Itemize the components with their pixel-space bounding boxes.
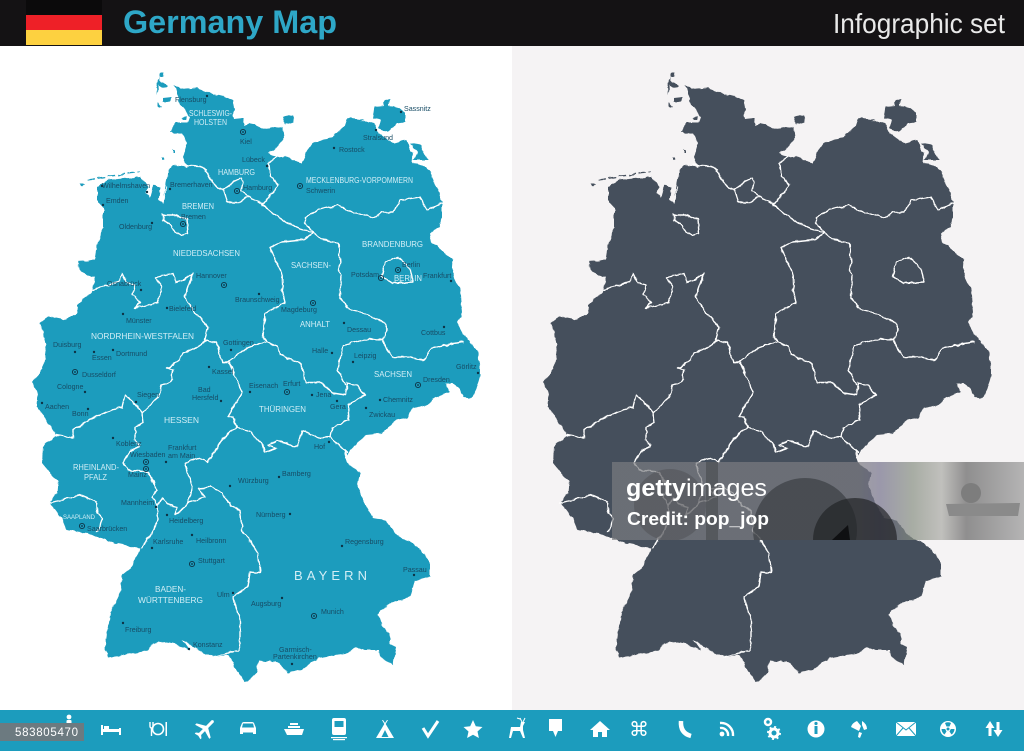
icon: information — [808, 720, 824, 738]
icon: house — [590, 721, 610, 737]
city labels: Bad — [198, 386, 211, 394]
city labels: Flensburg — [175, 96, 207, 104]
city labels: Görlitz — [456, 363, 477, 371]
watermark — [612, 462, 1024, 540]
icon: envelope — [896, 722, 916, 736]
icon: fork and plate — [150, 722, 167, 736]
region labels: NIEDEDSACHSEN — [173, 248, 240, 258]
city labels: Hamburg — [243, 184, 272, 192]
watermark logo: gettyimages — [626, 475, 767, 502]
city labels: Münster — [126, 317, 152, 325]
city labels: Ulm — [217, 591, 230, 599]
header bar — [0, 0, 1024, 46]
icon: airplane — [191, 713, 221, 743]
region labels: HOLSTEN — [194, 117, 227, 127]
city labels: Aachen — [45, 403, 69, 411]
city labels: Berlin — [402, 261, 420, 269]
icon: RSS feed — [720, 723, 733, 736]
region labels: BADEN- — [155, 584, 186, 594]
icon: gears — [765, 719, 780, 739]
city labels: Wiesbaden — [130, 451, 166, 459]
city labels: Bremerhaven — [170, 181, 213, 189]
city labels: Hersfeld — [192, 394, 218, 402]
city labels: Partenkirchen — [273, 653, 317, 661]
region labels: SACHSEN- — [291, 260, 331, 270]
map: dark unlabelled Germany — [543, 73, 991, 682]
region labels: BAYERN — [294, 568, 367, 583]
icon: car — [240, 722, 256, 734]
city labels: Hof — [314, 443, 325, 451]
city labels — [45, 96, 477, 661]
icon: check mark — [423, 721, 438, 736]
region labels: HESSEN — [164, 415, 199, 425]
city labels: Eisenach — [249, 382, 278, 390]
watermark credit: Credit: pop_jop — [627, 509, 769, 529]
city labels: Jena — [316, 391, 331, 399]
region labels: WÜRTTENBERG — [138, 595, 203, 605]
city labels: Halle — [312, 347, 328, 355]
icon: command key: ⌘ — [629, 717, 649, 741]
city labels: Frankfurt — [423, 272, 451, 280]
region labels: MECKLENBURG-VORPOMMERN — [306, 176, 413, 185]
city labels: Würzburg — [238, 477, 269, 485]
city labels: Stuttgart — [198, 557, 225, 565]
region labels: SACHSEN — [374, 369, 412, 379]
city labels: Zwickau — [369, 411, 395, 419]
city labels: Essen — [92, 354, 112, 362]
city labels: Bielefeld — [169, 305, 196, 313]
icon: globe — [851, 721, 867, 738]
city labels: Magdeburg — [281, 306, 317, 314]
icon: up and down arrows — [986, 721, 1002, 737]
city labels: Dessau — [347, 326, 371, 334]
city labels: Sassnitz — [404, 105, 431, 113]
city labels: am Main — [168, 452, 195, 460]
region labels: BERLIN — [394, 273, 422, 283]
city labels: Osnabrück — [107, 280, 142, 288]
icon: map pin — [549, 719, 562, 737]
city labels: Augsburg — [251, 600, 281, 608]
city labels: Karlsruhe — [153, 538, 183, 546]
city labels: Saarbrücken — [87, 525, 127, 533]
city labels: Hannover — [196, 272, 227, 280]
city labels: Lübeck — [242, 156, 265, 164]
city labels: Potsdam — [351, 271, 379, 279]
city labels: Chemnitz — [383, 396, 413, 404]
region labels: HAMBURG — [218, 167, 255, 177]
region labels: PFALZ — [84, 472, 107, 482]
city labels: Kassel — [212, 368, 234, 376]
city labels: Nürnberg — [256, 511, 286, 519]
city labels: Braunschweig — [235, 296, 280, 304]
city labels: Bonn — [72, 410, 89, 418]
city labels: Cottbus — [421, 329, 446, 337]
city labels: Dortmund — [116, 350, 147, 358]
city labels: Duisburg — [53, 341, 81, 349]
city labels: Heilbronn — [196, 537, 226, 545]
region labels: SCHLESWIG- — [189, 108, 232, 118]
city labels: Bamberg — [282, 470, 311, 478]
city labels: Freiburg — [125, 626, 151, 634]
city labels: Kiel — [240, 138, 252, 146]
city labels: Konstanz — [193, 641, 223, 649]
image ID badge: 583805470 — [15, 727, 78, 739]
region labels: BREMEN — [182, 201, 214, 211]
city markers — [41, 95, 479, 665]
city labels: Gottingen — [223, 339, 254, 347]
city labels: Mainz — [128, 471, 147, 479]
city labels: Regensburg — [345, 538, 384, 546]
city labels: Passau — [403, 566, 427, 574]
title: Germany Map — [123, 4, 337, 40]
map: teal labelled Germany — [32, 73, 480, 682]
city labels: Koblenz — [116, 440, 142, 448]
icon: deer — [509, 718, 525, 738]
city labels: Oldenburg — [119, 223, 152, 231]
city labels: Dusseldorf — [82, 371, 116, 379]
city labels: Cologne — [57, 383, 83, 391]
icon: person — [66, 715, 72, 739]
icon: telephone — [681, 721, 691, 736]
image ID badge — [0, 723, 84, 741]
city labels: Siegen — [137, 391, 159, 399]
region labels: BRANDENBURG — [362, 239, 423, 249]
city labels: Heidelberg — [169, 517, 203, 525]
panel: right background — [512, 46, 1024, 710]
icon: ship — [284, 723, 304, 735]
city labels: Stralsund — [363, 134, 393, 142]
city labels: Munich — [321, 608, 344, 616]
region labels — [63, 108, 423, 605]
city labels: Leipzig — [354, 352, 377, 360]
city labels: Schwerin — [306, 187, 335, 195]
icon bar — [0, 710, 1024, 751]
subtitle: Infographic set — [833, 8, 1005, 39]
region labels: THÜRINGEN — [259, 404, 306, 414]
city labels: Bremen — [181, 213, 206, 221]
region labels: RHEINLAND- — [73, 462, 119, 472]
icon: radiation — [940, 721, 956, 737]
icon: German flag — [26, 0, 102, 45]
city labels: Garmisch- — [279, 646, 312, 654]
icon: tent — [376, 720, 394, 738]
city labels: Gera — [330, 403, 346, 411]
region labels: SAAPLAND — [63, 514, 95, 521]
city labels: Rostock — [339, 146, 365, 154]
region labels: ANHALT — [300, 319, 330, 329]
city labels: Emden — [106, 197, 129, 205]
region labels: NORDRHEIN-WESTFALEN — [91, 331, 194, 341]
city labels: Wilhelmshaven — [102, 182, 150, 190]
city labels: Frankfurt — [168, 444, 196, 452]
city labels: Mannheim — [121, 499, 154, 507]
city labels: Erfurt — [283, 380, 300, 388]
icon: bed — [101, 725, 121, 735]
city labels: Dresden — [423, 376, 450, 384]
icon: train — [331, 718, 347, 740]
icon: star — [464, 720, 482, 738]
